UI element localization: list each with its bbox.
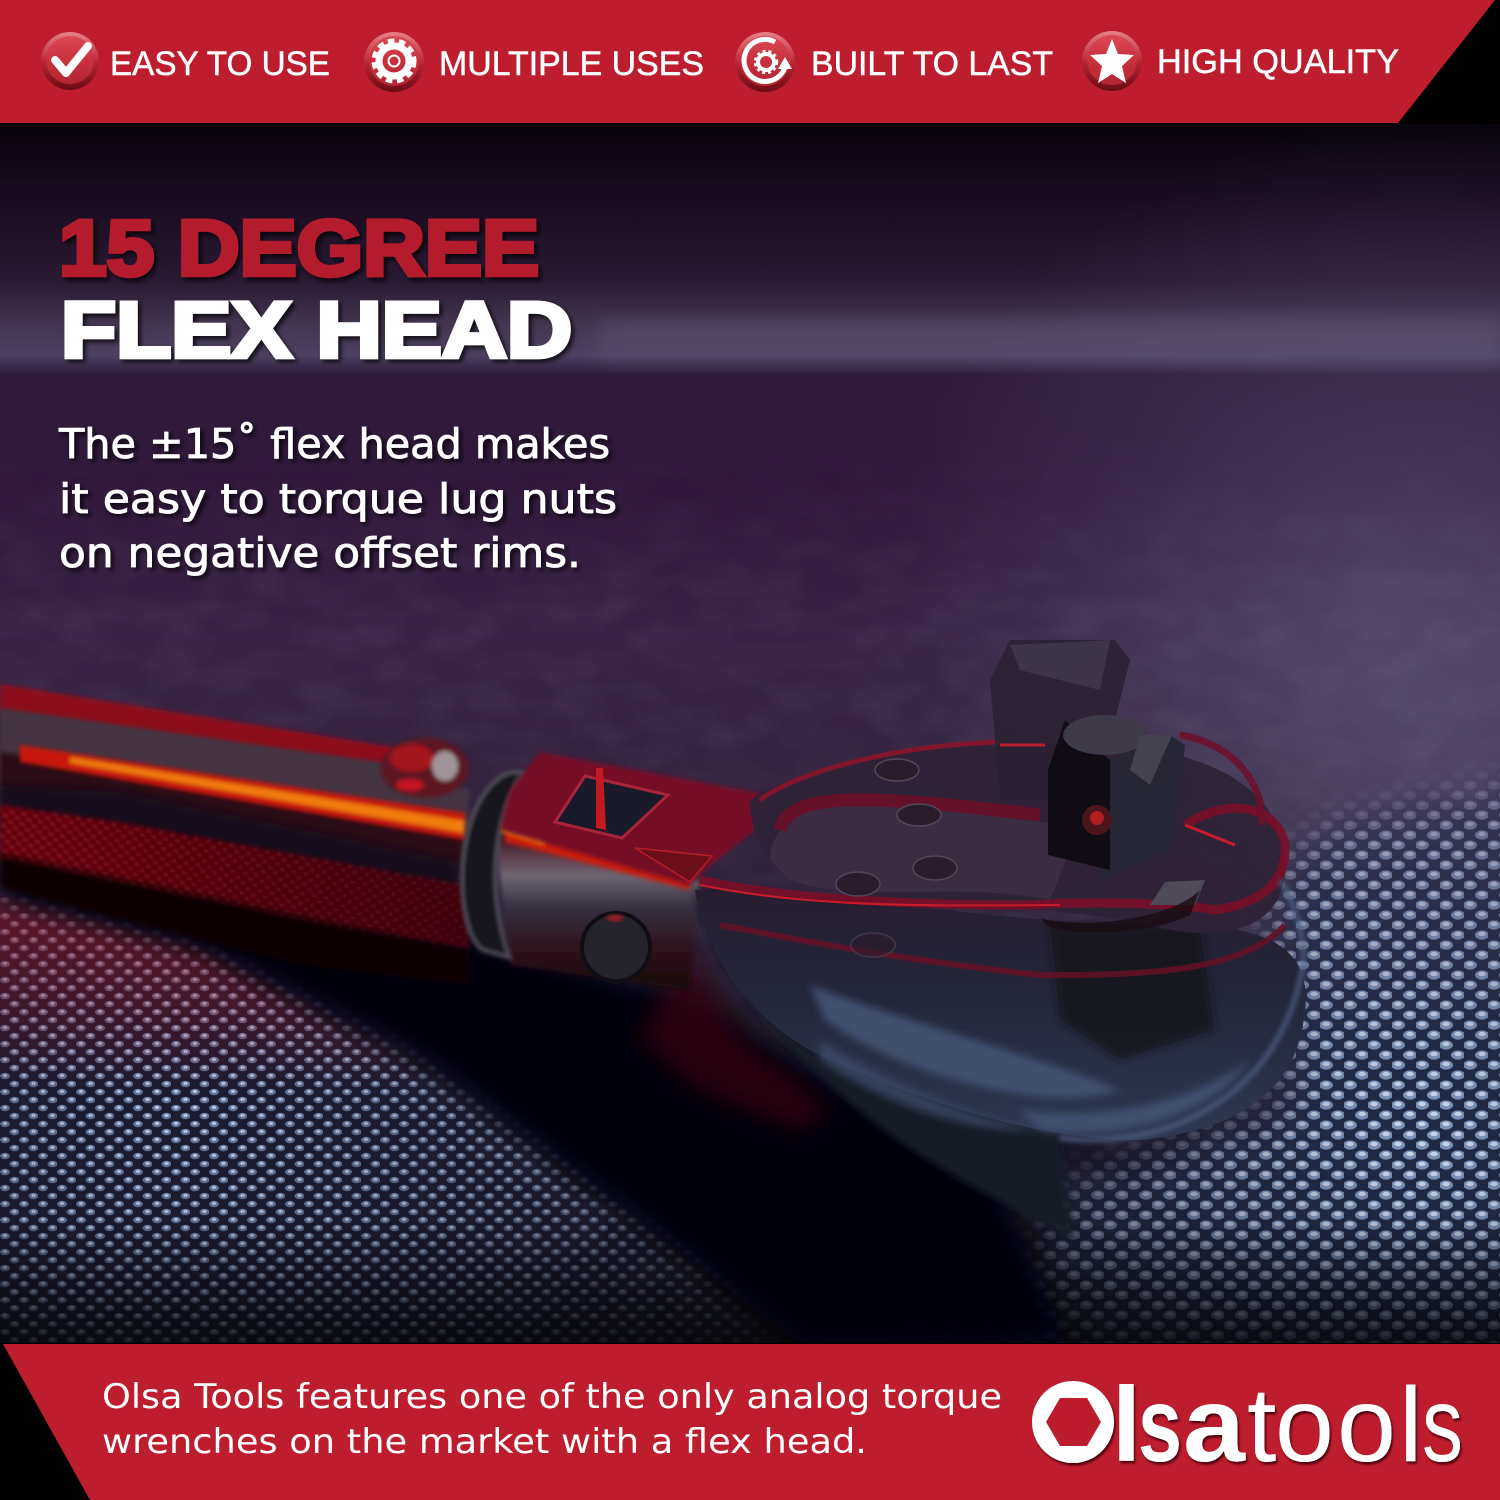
description text: The ±15˚ flex head makes	[58, 420, 610, 468]
logo: Olsatools: s	[1422, 1366, 1463, 1484]
footer text: wrenches on the market with a flex head.	[102, 1422, 867, 1462]
screws	[836, 759, 957, 957]
red upper edge	[0, 684, 400, 768]
banner shape	[3, 1344, 1500, 1500]
description text: on negative offset rims.	[59, 529, 581, 577]
wrench collar and ring	[462, 772, 700, 990]
main head body	[695, 889, 1306, 1140]
feature: easy to use: EASY TO USE	[110, 45, 330, 83]
wrench shadow	[0, 860, 1070, 1343]
torque wrench handle	[0, 684, 470, 985]
front anvil	[1100, 735, 1185, 880]
woven fabric, left foreground	[0, 894, 784, 1343]
dim red knurl reflection	[640, 950, 830, 1130]
logo: Olsatools: tool	[1247, 1366, 1423, 1484]
woven fabric, right foreground	[1026, 773, 1500, 1343]
top banner	[0, 0, 1495, 123]
lower blurred head ghost	[695, 890, 1075, 1240]
upper head plate	[750, 743, 1285, 933]
chrome shaft	[0, 706, 470, 824]
square drive anvil	[990, 640, 1235, 932]
feature: multiple uses: MULTIPLE USES	[439, 45, 704, 83]
icon: check mark	[41, 32, 99, 90]
headline: FLEX HEAD	[61, 285, 572, 374]
description text: it easy to torque lug nuts	[59, 475, 617, 523]
footer text	[102, 1377, 1002, 1462]
rear ghost anvil	[990, 640, 1130, 745]
headline	[59, 203, 572, 374]
knurled red grip	[0, 805, 470, 950]
feature: easy to use	[41, 32, 330, 90]
icon: gear with circular arrow	[735, 32, 795, 92]
blue reflected streaks	[810, 985, 1250, 1132]
banner shape	[0, 0, 1495, 123]
feature: built to last	[735, 32, 1053, 92]
feature: high quality	[1082, 31, 1399, 91]
flex head: translucent motion layers	[695, 735, 1306, 1240]
rivet	[381, 738, 469, 798]
bright rim lines	[700, 885, 1060, 905]
icon: star	[1082, 31, 1142, 91]
logo: Olsatools	[1032, 1363, 1463, 1484]
footer text: Olsa Tools features one of the only analog torque	[102, 1377, 1002, 1417]
orange light stripe	[20, 745, 465, 840]
description text	[58, 420, 617, 577]
feature: built to last: BUILT TO LAST	[811, 45, 1053, 83]
logo: Olsatools: a	[1183, 1366, 1246, 1484]
logo: Olsatools: l	[1112, 1366, 1141, 1484]
feature: high quality: HIGH QUALITY	[1157, 43, 1399, 81]
plate ridge	[770, 806, 1066, 900]
logo: Olsatools: s	[1138, 1366, 1182, 1484]
red outline of head	[700, 808, 1285, 910]
logo O with hex nut counter: O	[1033, 1363, 1113, 1484]
head base block with window	[500, 752, 770, 885]
push button	[582, 913, 650, 981]
feature: multiple uses	[364, 32, 704, 92]
icon: gear	[364, 32, 424, 92]
headline: 15 DEGREE	[59, 203, 539, 292]
bottom banner	[3, 1344, 1500, 1500]
dark ghost of anvil inside body	[1050, 925, 1215, 1060]
